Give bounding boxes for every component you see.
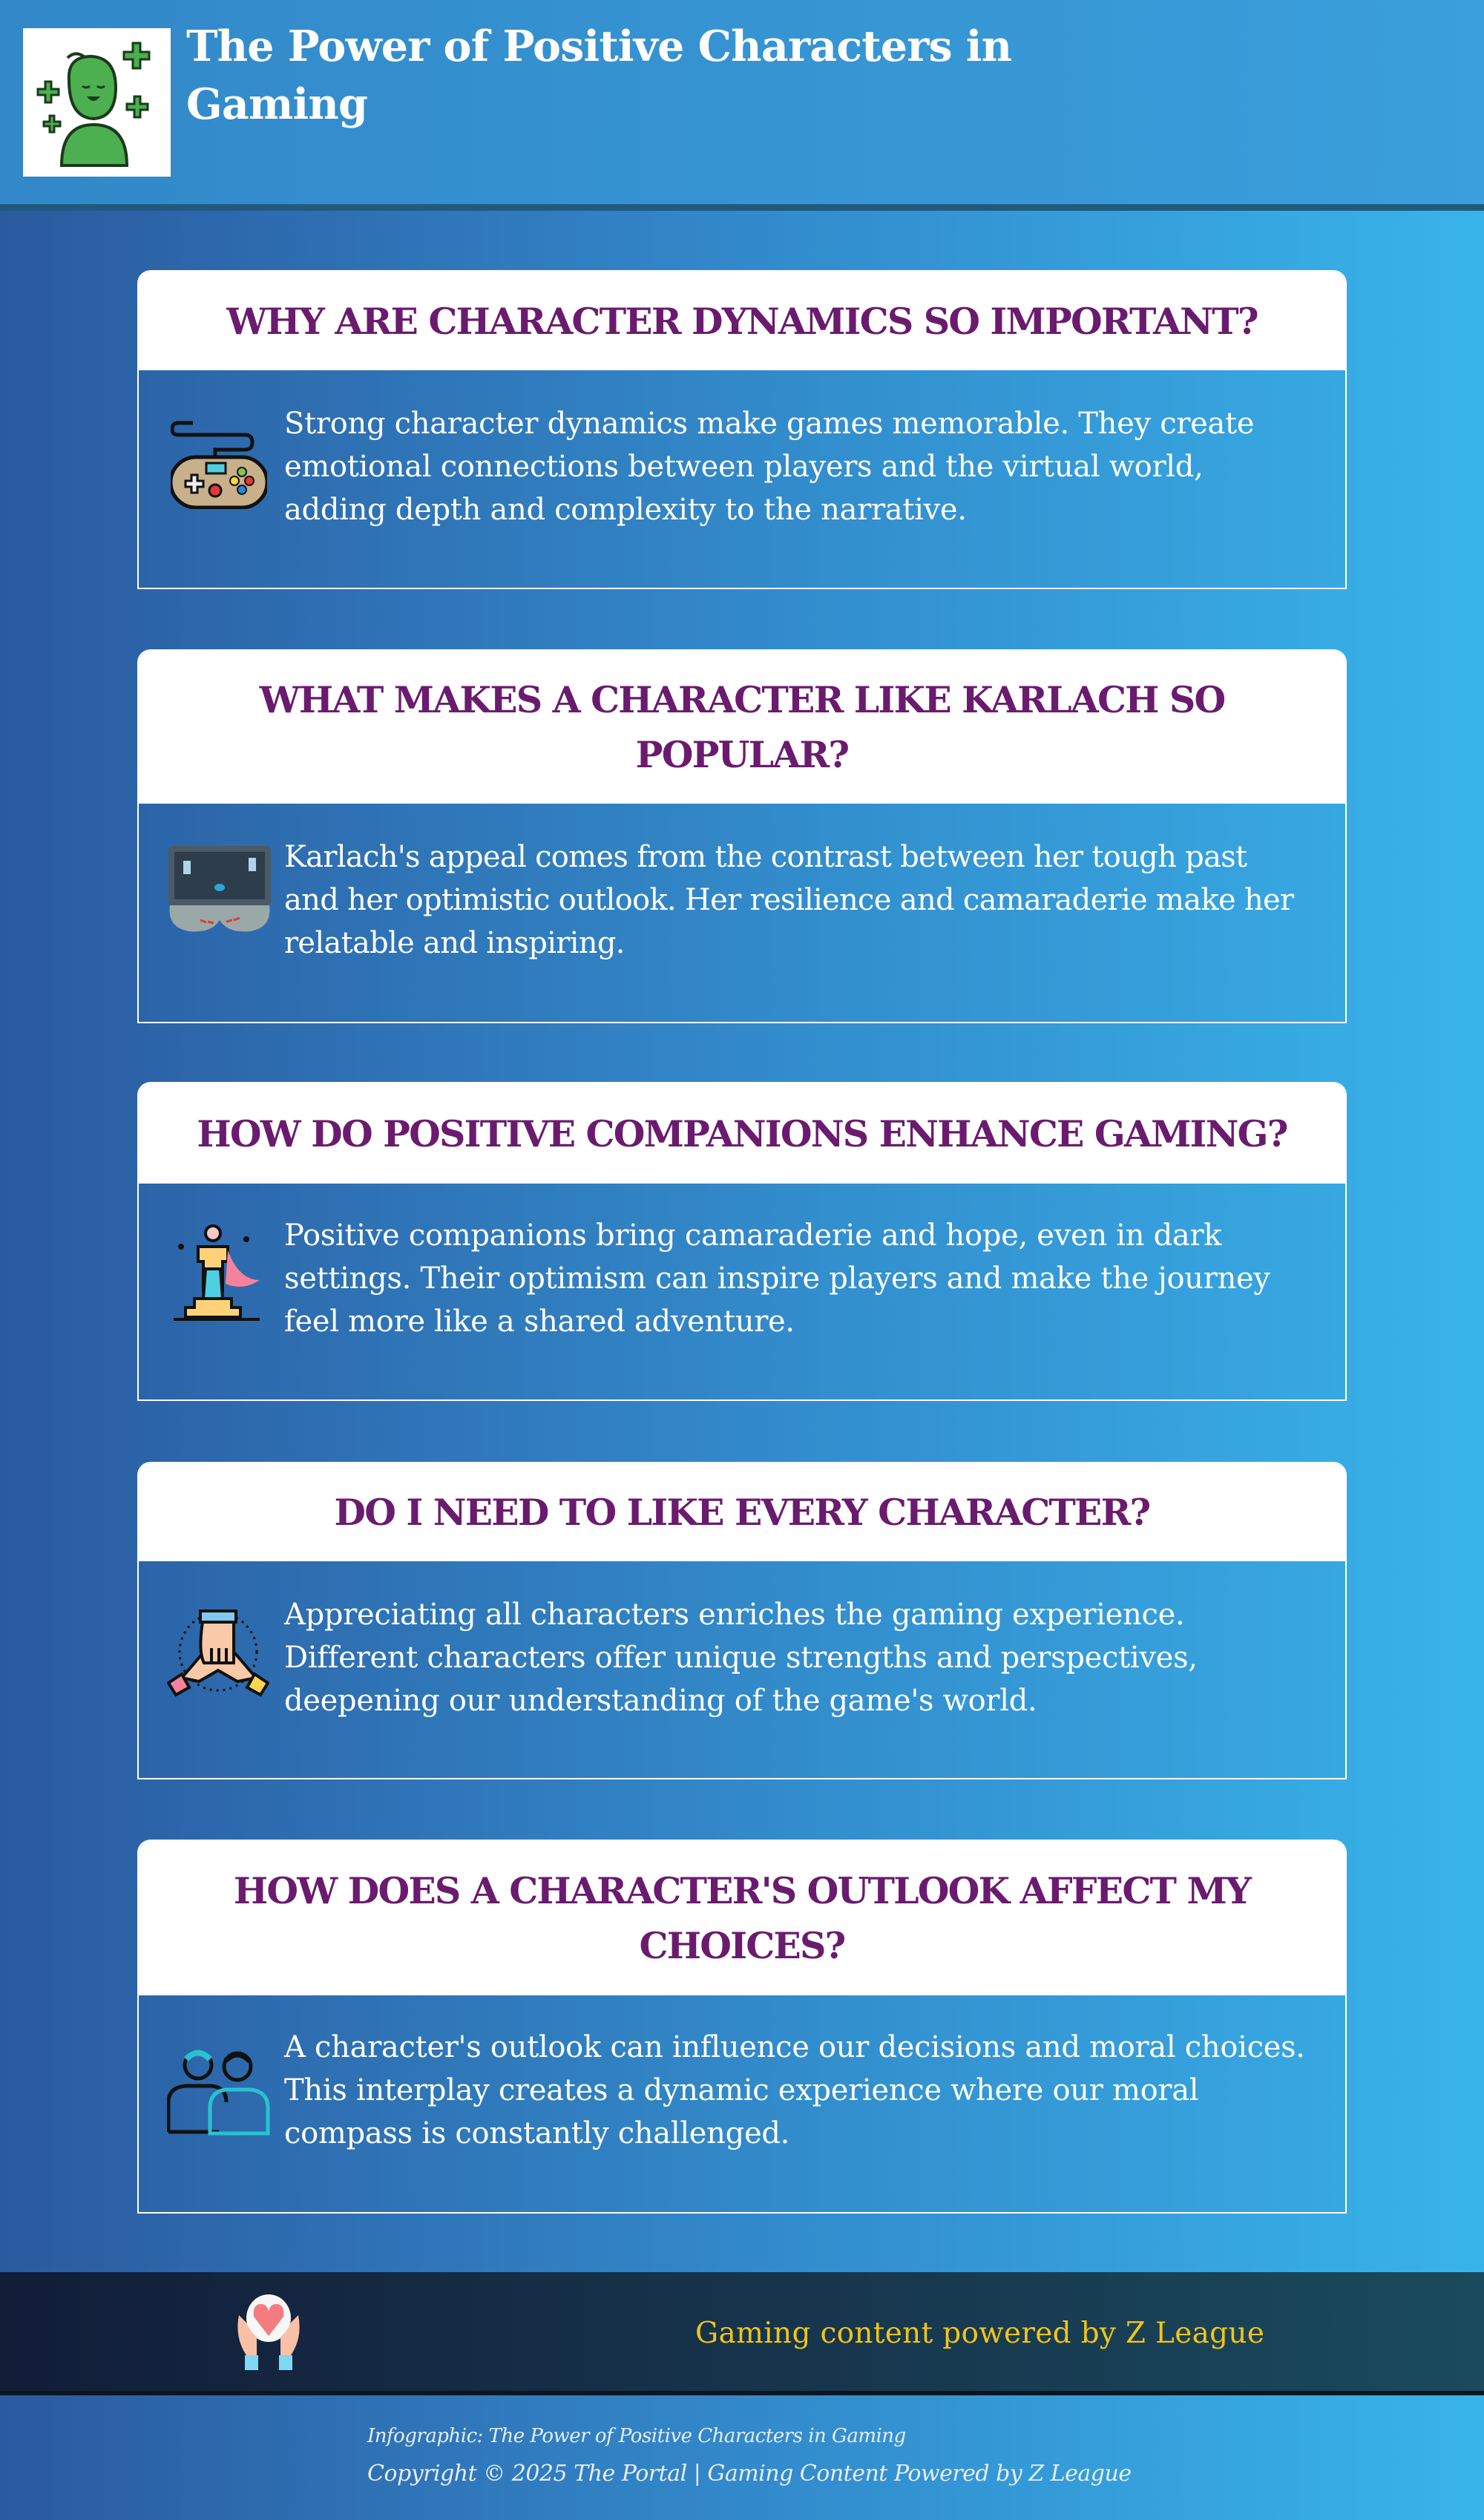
heading — [139, 1083, 1345, 1184]
icon: two people — [167, 2050, 270, 2136]
panel: Karlach — [137, 649, 1347, 1023]
footer band — [0, 2272, 1484, 2391]
icon: handheld console — [168, 846, 271, 932]
body text: compass is constantly challenged. — [284, 2116, 789, 2150]
icon: game controller — [171, 421, 267, 509]
heading: CHOICES? — [640, 1924, 844, 1967]
heading — [139, 1463, 1345, 1561]
footer credits: Infographic: The Power of Positive Characters in Gaming — [367, 2425, 906, 2447]
body text: Strong character dynamics make games memorable. They create — [284, 407, 1254, 441]
body text: emotional connections between players and the virtual world, — [284, 450, 1204, 484]
icon: hero on podium — [174, 1224, 260, 1321]
body text: relatable and inspiring. — [284, 926, 625, 960]
body text — [284, 407, 1254, 527]
body text — [283, 1598, 1198, 1718]
heading: DO I NEED TO LIKE EVERY CHARACTER? — [335, 1491, 1149, 1534]
heading — [139, 272, 1345, 370]
logo: green smiling character — [23, 28, 171, 177]
copyright: Copyright © 2025 The Portal | Gaming Content Powered by Z League — [367, 2461, 1132, 2487]
panel: positive companions — [137, 1082, 1347, 1401]
body text: A character's outlook can influence our decisions and moral choices. — [284, 2030, 1305, 2064]
panel: like every character — [137, 1462, 1347, 1779]
body text: and her optimistic outlook. Her resilience and camaraderie make her — [284, 883, 1293, 917]
body text: Appreciating all characters enriches the gaming experience. — [284, 1598, 1184, 1632]
body text: Karlach's appeal comes from the contrast between her tough past — [284, 840, 1247, 874]
heading: WHY ARE CHARACTER DYNAMICS SO IMPORTANT? — [226, 300, 1258, 343]
body text — [284, 840, 1294, 960]
body text: adding depth and complexity to the narrative. — [284, 493, 967, 527]
heading — [139, 651, 1345, 804]
body text — [283, 2030, 1305, 2150]
body text — [284, 1218, 1270, 1339]
icon: hands holding heart — [237, 2294, 300, 2370]
title: Gaming — [186, 79, 367, 129]
body text: settings. Their optimism can inspire players and make the journey — [284, 1261, 1270, 1296]
heading: WHAT MAKES A CHARACTER LIKE KARLACH SO — [260, 678, 1224, 721]
body text: feel more like a shared adventure. — [284, 1305, 795, 1339]
heading: POPULAR? — [636, 733, 848, 776]
heading: HOW DO POSITIVE COMPANIONS ENHANCE GAMING? — [197, 1112, 1287, 1155]
body text: Different characters offer unique strengths and perspectives, — [284, 1641, 1198, 1675]
icon: joined hands — [167, 1610, 269, 1697]
panel: character outlook — [137, 1840, 1347, 2214]
title — [186, 22, 1011, 129]
body text: Positive companions bring camaraderie and hope, even in dark — [284, 1218, 1221, 1253]
body text: deepening our understanding of the game's world. — [284, 1684, 1037, 1718]
title: The Power of Positive Characters in — [186, 22, 1011, 71]
body text: This interplay creates a dynamic experience where our moral — [284, 2073, 1198, 2107]
footer tagline: Gaming content powered by Z League — [695, 2317, 1264, 2350]
heading: HOW DOES A CHARACTER'S OUTLOOK AFFECT MY — [234, 1869, 1250, 1912]
panel: character dynamics — [137, 270, 1347, 589]
heading — [139, 1841, 1345, 1995]
header band — [0, 0, 1484, 204]
